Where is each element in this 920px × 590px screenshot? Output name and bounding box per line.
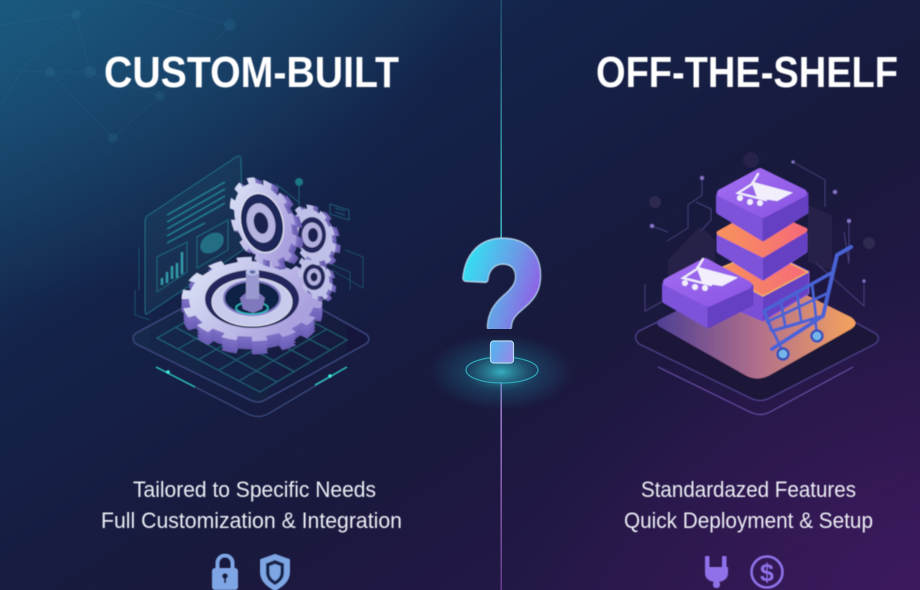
gear medium xyxy=(292,200,339,271)
platform lower edge xyxy=(156,367,347,416)
holographic screen xyxy=(135,156,363,320)
glow xyxy=(429,334,573,410)
question mark glyph: ? xyxy=(459,206,546,400)
question mark glyph xyxy=(462,236,542,329)
icon: cart on top box xyxy=(737,174,790,206)
icon: plug xyxy=(705,556,728,588)
title: custom-built: CUSTOM-BUILT xyxy=(104,48,399,97)
stack layer three xyxy=(716,250,808,320)
platform xyxy=(133,273,369,402)
gear small xyxy=(299,251,335,305)
shopping cart xyxy=(764,247,851,360)
platform xyxy=(636,274,878,400)
platform lower edge xyxy=(658,367,853,414)
stack box top xyxy=(720,172,808,241)
description: off-the-shelf: Quick Deployment & Setup xyxy=(624,508,873,533)
center divider xyxy=(500,0,502,590)
description: custom-built xyxy=(101,477,402,533)
illustration: gears on platform xyxy=(133,156,369,416)
description: custom-built: Tailored to Specific Needs xyxy=(133,477,376,502)
description: off-the-shelf xyxy=(624,477,873,533)
question mark emblem xyxy=(438,236,564,406)
icon: cart on small box xyxy=(682,259,735,291)
illustration: shopping stack and cart xyxy=(636,152,878,414)
circuit grid xyxy=(157,287,347,392)
question mark dot xyxy=(490,341,514,363)
ring xyxy=(466,357,538,383)
description: custom-built: Full Customization & Integration xyxy=(101,508,402,533)
large gear xyxy=(186,259,318,352)
panel: custom-built xyxy=(101,48,402,590)
icon: dollar coin: $ xyxy=(760,559,774,587)
icon: shield xyxy=(261,555,289,590)
gear large upright xyxy=(233,171,300,276)
gradient pad xyxy=(657,274,856,378)
icon: dollar coin xyxy=(752,556,782,588)
panel: off-the-shelf xyxy=(596,48,898,588)
faint circuit backdrop xyxy=(645,152,875,311)
icon: lock xyxy=(212,556,238,590)
question mark glyph: ? xyxy=(459,206,546,400)
stack layer two xyxy=(719,210,807,280)
description: off-the-shelf: Standardazed Features xyxy=(641,477,856,502)
small box xyxy=(666,259,753,328)
